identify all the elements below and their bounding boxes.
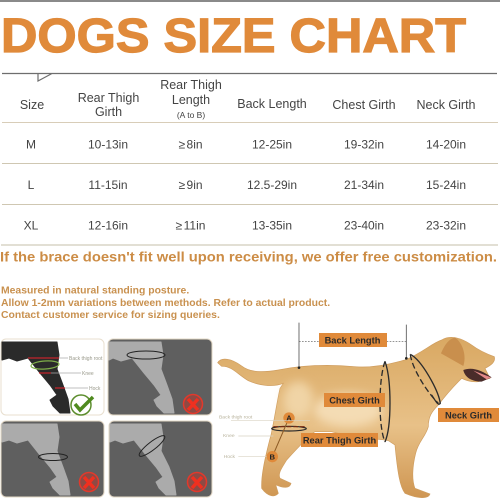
dog ear	[441, 337, 465, 366]
label: back length: Back Length	[325, 335, 381, 345]
wrong tape	[137, 433, 167, 459]
table row: L: 15-24in	[426, 178, 466, 192]
marker A: A	[286, 414, 292, 423]
table row: L: L	[28, 178, 35, 192]
marker A	[283, 412, 295, 424]
label: chest girth: Chest Girth	[329, 395, 380, 405]
leg: grey	[110, 424, 176, 495]
leg level labels: Hock	[224, 454, 236, 460]
leg level labels	[219, 414, 253, 460]
dog mouth	[463, 369, 492, 382]
table row: M	[26, 138, 466, 152]
icon: green check	[71, 395, 93, 415]
leg: black	[2, 342, 70, 413]
table header row: Girth	[95, 105, 122, 119]
chest girth loop	[380, 361, 390, 442]
marker line A to B	[272, 418, 289, 457]
measurement notes	[1, 286, 330, 321]
measurement notes: Allow 1-2mm variations between methods. Refer to actual product.	[1, 298, 330, 309]
guide labels: Back thigh root	[69, 356, 103, 362]
leg level lines	[231, 421, 310, 457]
dog diagram	[218, 323, 495, 498]
neck girth loop	[410, 354, 440, 404]
table row: L: 21-34in	[344, 178, 384, 192]
panel: wrong measurement at knee	[1, 421, 104, 497]
label: rear thigh girth	[301, 433, 378, 447]
table header row: Rear Thigh	[160, 78, 222, 92]
icon: red cross	[80, 472, 98, 492]
guide labels: Hock	[89, 386, 101, 392]
title: DOGS SIZE CHART	[1, 10, 466, 63]
customization notice: If the brace doesn't fit well upon receiving, we offer free customization.	[0, 250, 497, 264]
table header row: Size	[20, 98, 44, 112]
back length markers	[298, 323, 408, 369]
label: rear thigh girth: Rear Thigh Girth	[303, 435, 376, 445]
table header row: Neck Girth	[416, 98, 476, 112]
wrong tape	[127, 351, 165, 359]
table header row: Back Length	[237, 97, 307, 111]
wrong tape	[38, 454, 68, 460]
marker B: B	[270, 452, 276, 461]
panel: correct measurement	[1, 339, 104, 415]
leg level labels: Back thigh root	[219, 414, 253, 420]
leg level labels: Knee	[223, 433, 235, 439]
table header callout line	[2, 74, 497, 81]
panel: wrong measurement angled	[109, 421, 212, 497]
table header row	[20, 78, 476, 120]
table row: XL: XL	[24, 218, 39, 232]
table: size chart	[2, 78, 498, 232]
table row: XL	[24, 218, 466, 232]
table row: L	[28, 178, 466, 192]
dog body	[218, 337, 495, 498]
rear thigh girth loop	[272, 426, 306, 431]
guide labels	[69, 356, 103, 392]
measurement guides	[28, 358, 88, 388]
guide labels: Knee	[82, 371, 94, 377]
table row: M: 14-20in	[426, 138, 466, 152]
table row: L: ≥9in	[178, 178, 203, 192]
table header row: Length	[172, 93, 210, 107]
icon: red cross	[188, 472, 206, 492]
table row: XL: 12-16in	[88, 218, 128, 232]
table row: M: M	[26, 138, 36, 152]
label: neck girth	[438, 408, 499, 422]
panel: wrong measurement high on thigh	[108, 339, 212, 415]
table row: M: 10-13in	[88, 138, 128, 152]
dog belly highlight	[313, 393, 383, 427]
label: neck girth: Neck Girth	[445, 410, 492, 420]
table row: M: 19-32in	[344, 138, 384, 152]
table row: XL: 13-35in	[252, 218, 292, 232]
table row: M: ≥8in	[178, 138, 203, 152]
table row: XL: 23-32in	[426, 218, 466, 232]
dog thigh highlight	[283, 382, 313, 418]
table header row: (A to B)	[177, 110, 205, 120]
table row: M: 12-25in	[252, 138, 292, 152]
leg: grey	[2, 424, 70, 495]
table row: XL: 23-40in	[344, 218, 384, 232]
measurement notes: Contact customer service for sizing queries.	[1, 310, 220, 321]
marker B	[267, 451, 278, 462]
icon: red cross	[184, 394, 202, 414]
label: back length	[319, 333, 387, 347]
table row: L: 12.5-29in	[247, 178, 297, 192]
measurement notes: Measured in natural standing posture.	[1, 286, 189, 296]
leg: grey	[109, 342, 174, 413]
label: chest girth	[324, 393, 385, 407]
table header row: Rear Thigh	[78, 91, 139, 105]
table row: L: 11-15in	[88, 178, 128, 192]
table header row: Chest Girth	[332, 98, 396, 112]
table row: XL: ≥11in	[176, 218, 205, 232]
